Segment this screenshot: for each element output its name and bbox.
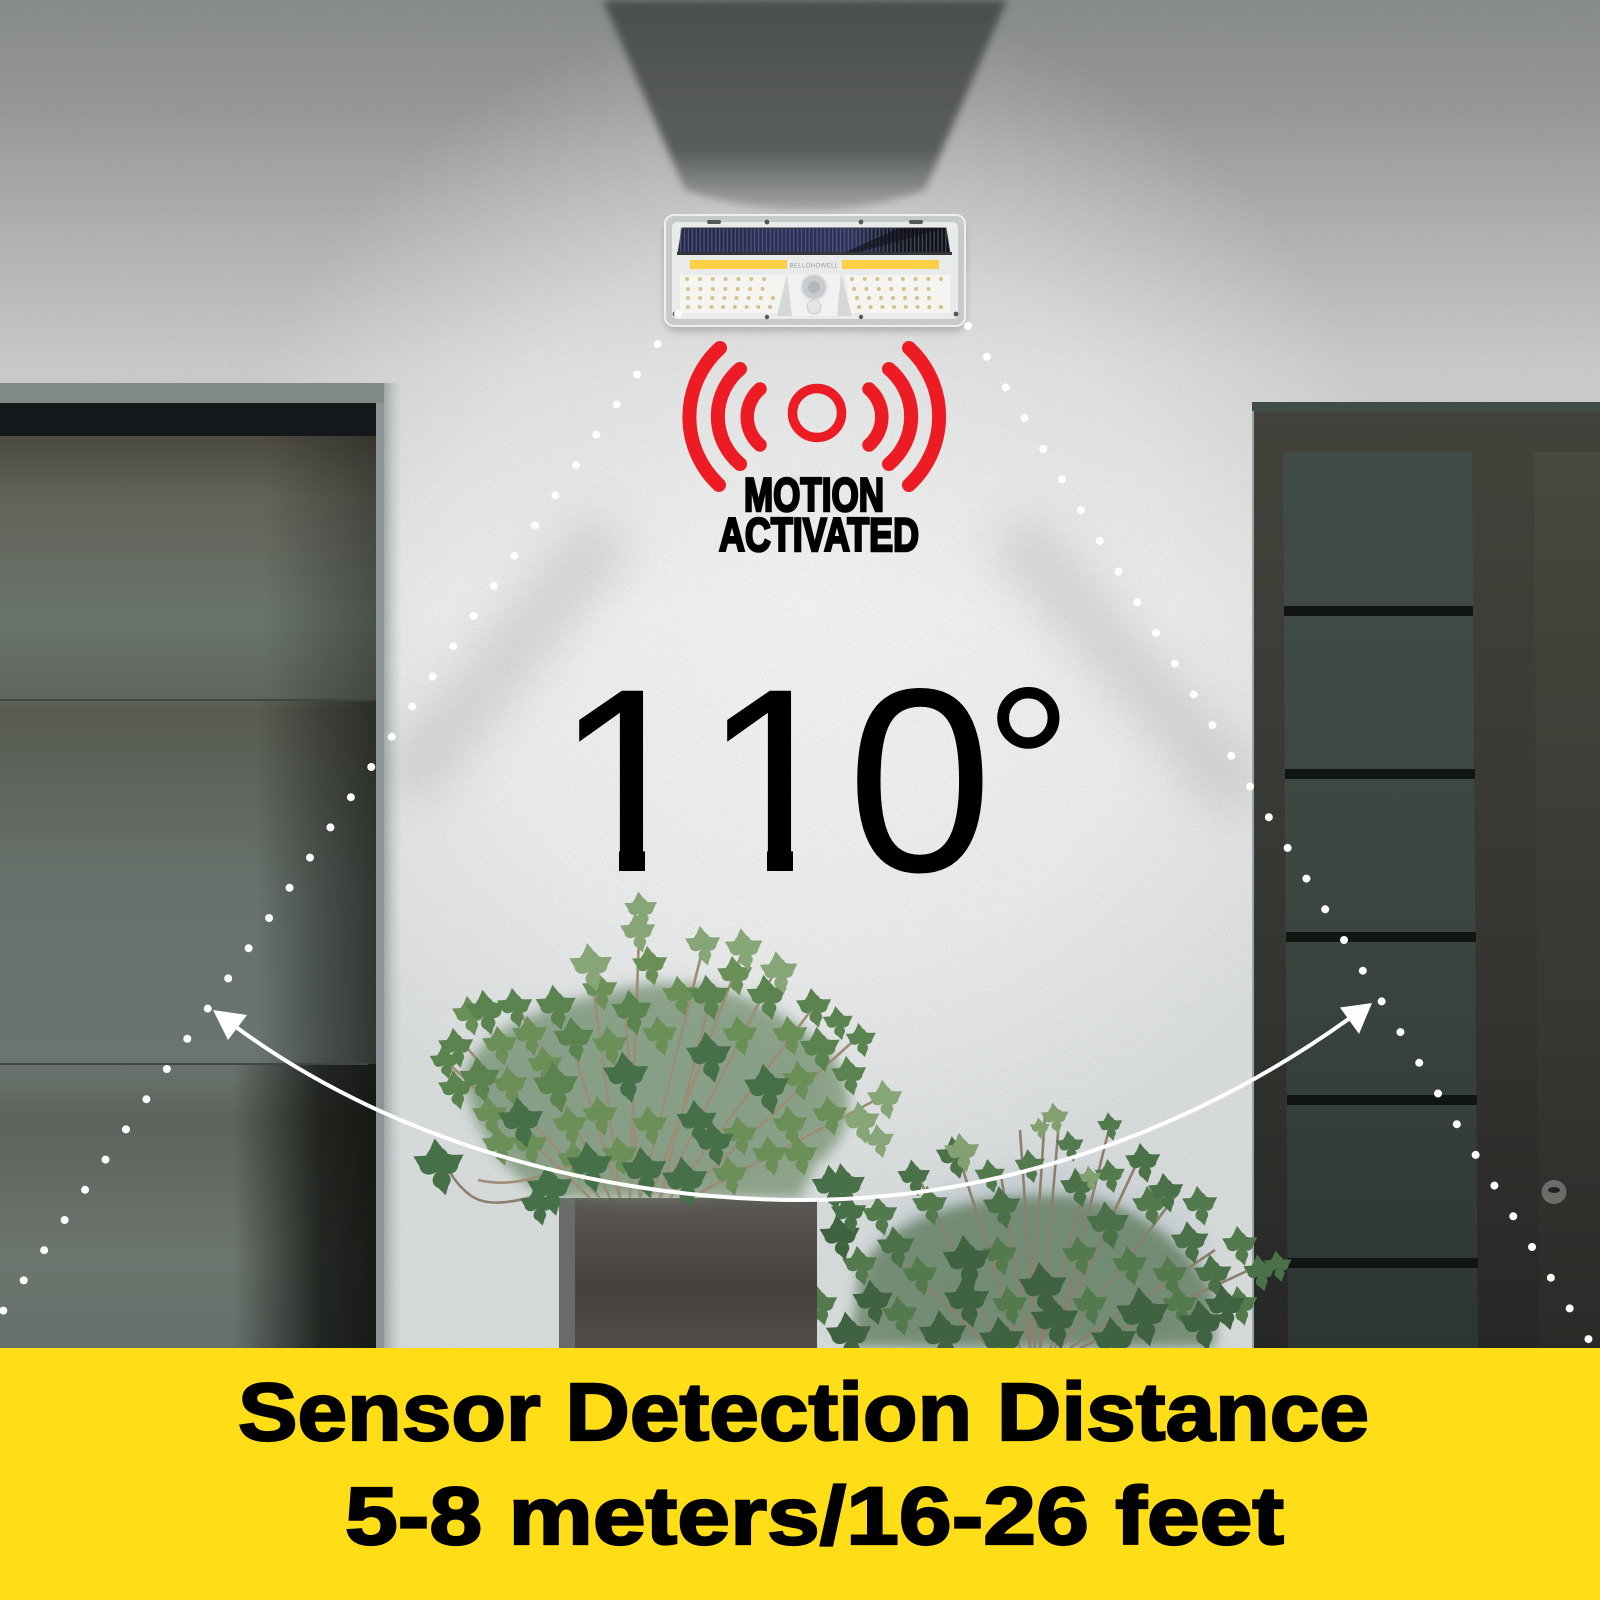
plant left: [409, 890, 906, 1235]
left door: [0, 383, 402, 1348]
dotted detection line: right: [968, 326, 1589, 1340]
solar panel: [678, 228, 950, 253]
glass panels: [1283, 452, 1478, 1348]
motion activated label: [719, 468, 919, 561]
planter pot: [559, 1198, 817, 1348]
center sensor module: [777, 274, 852, 316]
LED panels: [680, 275, 950, 313]
stems: [445, 905, 885, 1203]
plant right: [799, 1102, 1294, 1370]
dark panel divider stripes: [1284, 606, 1478, 1268]
angle value: [579, 687, 1060, 874]
brand text: BELLOHOWELL: [789, 264, 839, 270]
yellow caption band: [0, 1348, 1600, 1600]
light shadow streaks on wall: [400, 530, 1245, 800]
right door leaf: [1534, 452, 1600, 1348]
lamp: solar motion light: [665, 215, 965, 331]
dotted detection line: left: [3, 314, 678, 1311]
LED dots: [687, 279, 941, 307]
mounting tabs: [673, 220, 958, 319]
yellow COB strips: [690, 260, 939, 269]
shadow cone above lamp: [603, 0, 1007, 210]
caption text: Sensor Detection Distance: [238, 1367, 1369, 1458]
door keyhole: [1542, 1180, 1566, 1204]
angle value: °: [984, 642, 1073, 890]
angle value: 110: [554, 634, 993, 927]
caption text: [238, 1367, 1369, 1562]
right door: [1252, 402, 1600, 1348]
motion activated label: ACTIVATED: [719, 508, 919, 561]
caption text: 5-8 meters/16-26 feet: [345, 1471, 1284, 1562]
stems: [880, 1110, 1260, 1348]
motion activated label: MOTION: [744, 468, 884, 521]
motion icon: red waves: [689, 348, 939, 485]
curved double arrow: [213, 1003, 1372, 1200]
